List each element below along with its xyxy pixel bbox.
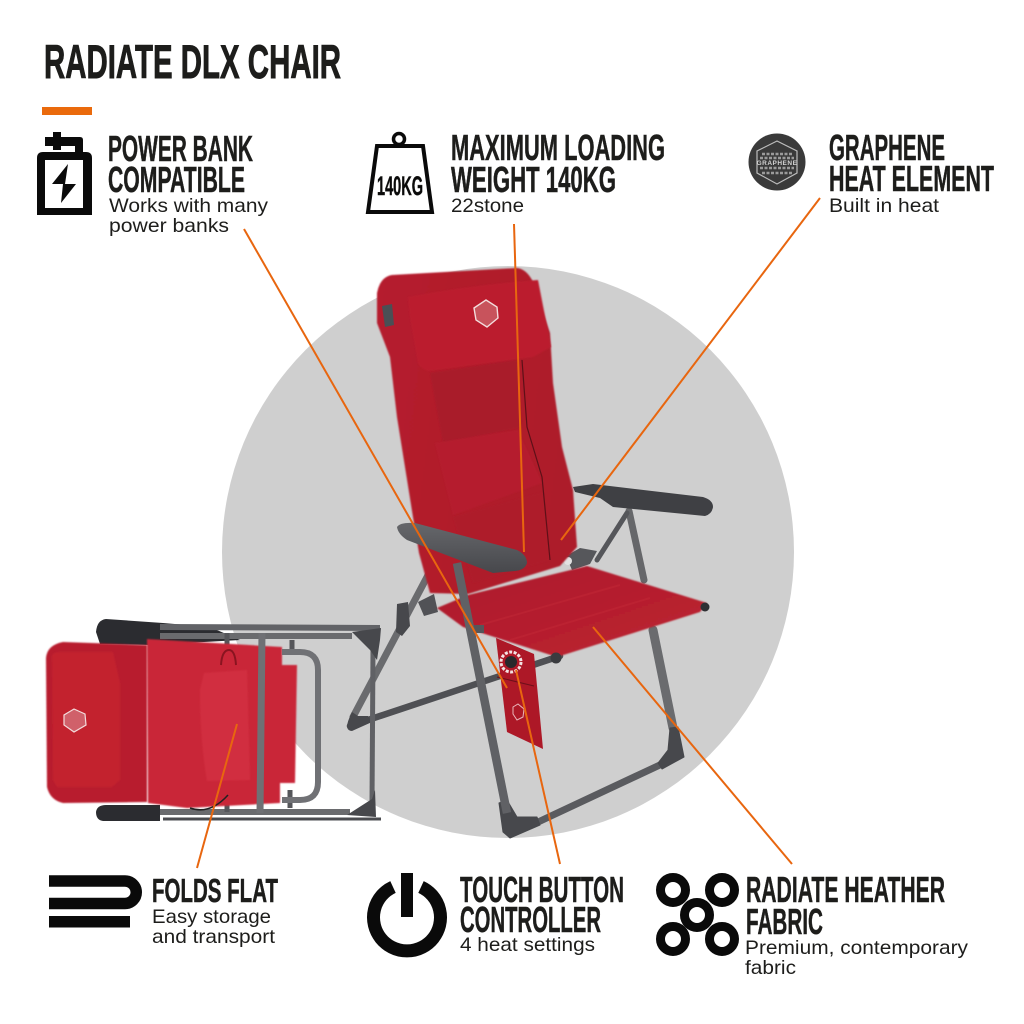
description: 4 heat settings xyxy=(460,934,595,956)
heading: FOLDS FLAT xyxy=(152,872,278,909)
description: 22stone xyxy=(451,195,524,217)
folded armrest ends xyxy=(96,619,240,645)
chair backrest xyxy=(377,268,577,594)
title accent bar xyxy=(42,107,92,115)
feature: graphene heat element xyxy=(748,127,994,217)
side label tab xyxy=(382,304,394,327)
folded pillow logo xyxy=(64,709,86,732)
folded cross bar xyxy=(260,633,262,813)
icon: fabric rings xyxy=(660,878,734,952)
description: Works with many xyxy=(109,195,268,217)
feature: radiate heather fabric xyxy=(660,869,968,979)
description: Easy storage xyxy=(152,906,271,928)
seat knobs xyxy=(700,602,710,612)
icon: weight: 140KG xyxy=(377,171,423,201)
right armrest xyxy=(573,484,713,516)
description: Premium, contemporary xyxy=(745,937,968,959)
folded U tube xyxy=(282,652,318,800)
seat xyxy=(437,566,707,657)
heading: TOUCH BUTTON xyxy=(460,869,624,910)
icon: folds xyxy=(49,881,136,928)
front leg xyxy=(457,563,507,813)
description: Built in heat xyxy=(829,195,940,217)
feature: power bank compatible xyxy=(37,128,268,237)
feature: power bank compatible: COMPATIBLE xyxy=(108,159,245,200)
folded chair photo xyxy=(46,619,381,821)
folded pillow xyxy=(52,652,120,787)
feature: maximum loading weight xyxy=(368,127,665,217)
headrest logo xyxy=(474,300,498,327)
main chair photo xyxy=(347,268,713,838)
icon: battery xyxy=(37,132,92,215)
feature: folds flat xyxy=(49,872,278,948)
folded frame xyxy=(160,627,381,819)
feature: radiate heather fabric: fabric xyxy=(745,957,796,979)
feature: folds flat: and transport xyxy=(152,926,276,948)
folded backrest xyxy=(46,642,147,803)
feature: touch button controller: CONTROLLER xyxy=(460,899,601,940)
heading: POWER BANK xyxy=(108,128,253,169)
feature: radiate heather fabric: FABRIC xyxy=(746,901,823,942)
feature: touch button controller xyxy=(374,869,624,956)
feature: maximum loading weight: WEIGHT 140KG xyxy=(451,159,616,200)
icon: graphene badge: GRAPHENE xyxy=(757,160,798,167)
folded seat xyxy=(147,639,297,808)
left armrest xyxy=(397,523,527,573)
title: RADIATE DLX CHAIR xyxy=(44,35,341,88)
backrest cushion panels xyxy=(430,360,522,443)
controller flap xyxy=(496,638,543,749)
headrest pillow xyxy=(408,280,551,371)
heading: MAXIMUM LOADING xyxy=(451,127,665,168)
frame feet and hinges xyxy=(347,712,372,731)
feature: power bank compatible: power banks xyxy=(109,215,229,237)
icon: graphene badge xyxy=(748,134,806,190)
orange leader lines xyxy=(197,198,820,868)
icon: power symbol xyxy=(374,873,440,951)
icon: weight xyxy=(368,134,432,212)
rear frame xyxy=(350,511,673,823)
background circle xyxy=(222,266,794,838)
